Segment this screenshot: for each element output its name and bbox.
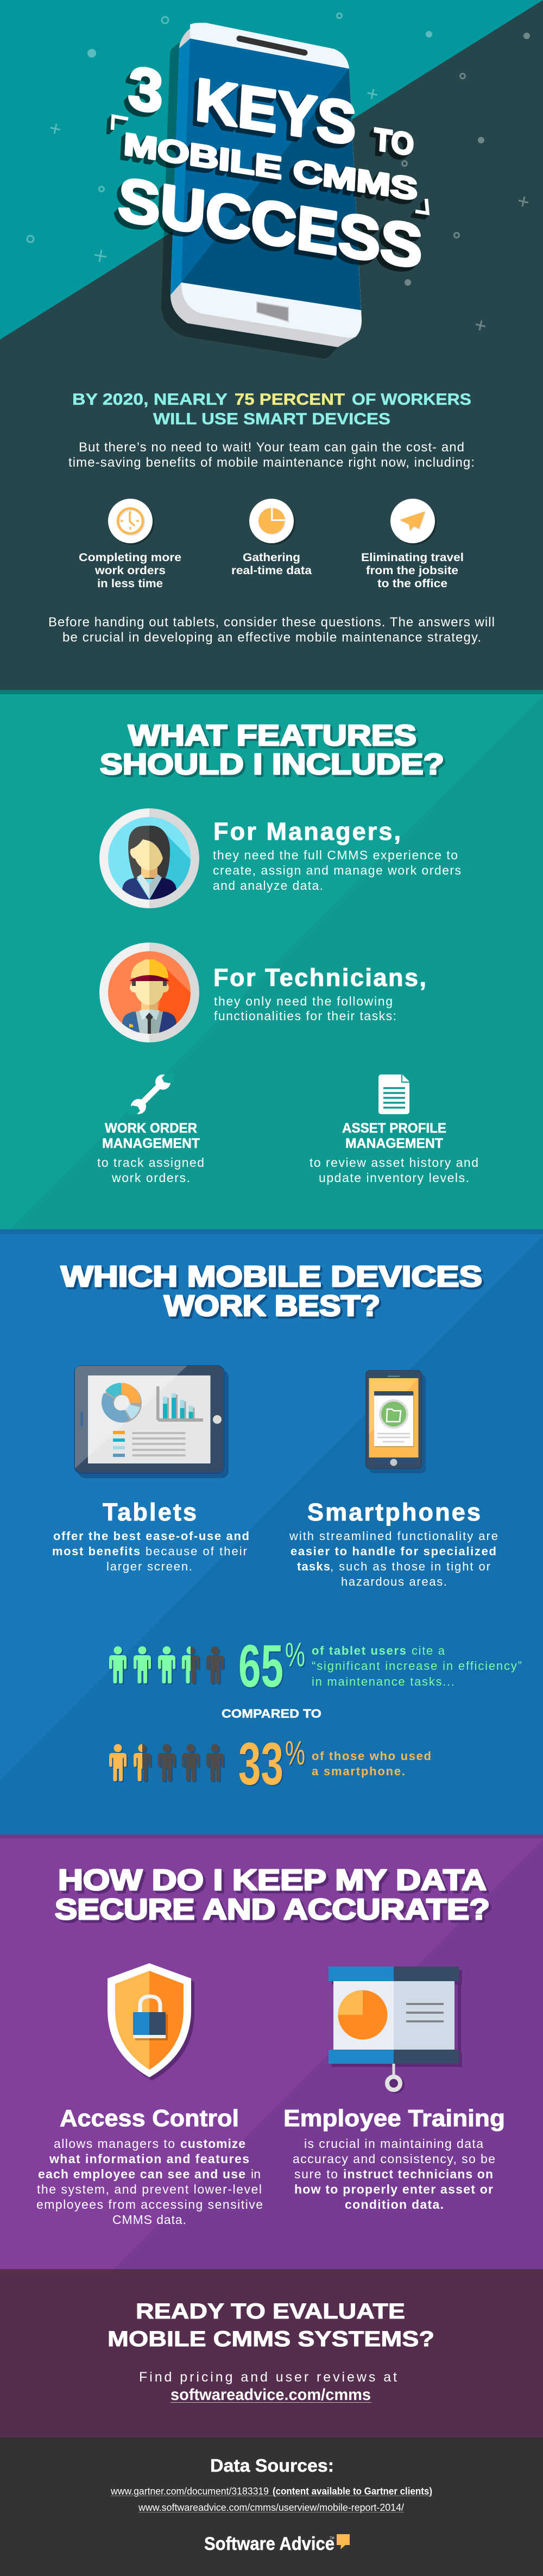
heading: data sources: Data Sources: bbox=[210, 2455, 334, 2476]
text: tablets: larger screen. bbox=[106, 1560, 192, 1573]
intro text: time-saving benefits of mobile maintenance right now, including: bbox=[68, 455, 475, 470]
chart: donut bbox=[102, 1383, 141, 1422]
panel: devices background bbox=[0, 1229, 543, 1834]
text: 65 percent caption: cite a bbox=[412, 1644, 445, 1657]
heading: ready to evaluate: MOBILE CMMS SYSTEMS? bbox=[108, 2327, 434, 2351]
panel: hero background bbox=[0, 0, 543, 690]
heading: ready to evaluate: READY TO EVALUATE bbox=[136, 2299, 405, 2323]
text: employee training: instruct technicians on bbox=[343, 2167, 493, 2181]
title: SUCCESS bbox=[117, 165, 424, 281]
heading: devices bbox=[61, 1260, 482, 1322]
feature: work order management: WORK ORDER bbox=[105, 1121, 197, 1136]
text: employee training: accuracy and consistency, so be bbox=[293, 2152, 495, 2166]
benefit: gathering real-time data bbox=[231, 499, 312, 577]
benefit: gathering real-time data: Gathering bbox=[243, 551, 300, 564]
intro text bbox=[68, 440, 475, 470]
text: tablets: because of their bbox=[146, 1544, 247, 1558]
panel: features background bbox=[0, 690, 543, 1229]
text: employee training: sure to bbox=[294, 2167, 338, 2181]
heading: ready to evaluate bbox=[108, 2299, 434, 2351]
benefit: eliminating travel: Eliminating travel bbox=[361, 551, 464, 564]
benefit: gathering real-time data: real-time data bbox=[231, 564, 312, 577]
text: find pricing: Find pricing and user reviews at bbox=[139, 2370, 397, 2385]
text: access control: the system, and prevent lower-level bbox=[37, 2182, 262, 2196]
sources: www.gartner.com/document/3183319 bbox=[110, 2486, 269, 2497]
icon: paper plane bbox=[400, 511, 426, 532]
text: 65 percent caption: in maintenance tasks... bbox=[312, 1675, 454, 1688]
list lines bbox=[113, 1431, 186, 1457]
benefit: eliminating travel: to the office bbox=[377, 577, 447, 590]
closing text: be crucial in developing an effective mobile maintenance strategy. bbox=[62, 630, 481, 645]
benefit: completing more work orders: in less time bbox=[97, 577, 163, 590]
text: smartphones: easier to handle for specialized bbox=[291, 1544, 496, 1558]
stat headline: WILL USE SMART DEVICES bbox=[153, 410, 390, 428]
text: 33 percent caption: a smartphone. bbox=[312, 1764, 405, 1778]
stat headline bbox=[72, 391, 471, 428]
heading: devices: WORK BEST? bbox=[164, 1290, 380, 1322]
stat: 33 percent number: % bbox=[285, 1735, 305, 1772]
text: for technicians: For Technicians, bbox=[213, 964, 426, 991]
icon: document bbox=[378, 1075, 409, 1114]
text: employee training bbox=[283, 2105, 505, 2211]
text: 65 percent caption: “significant increase in efficiency” bbox=[312, 1659, 522, 1673]
feature: asset profile management: to review asset history and bbox=[310, 1155, 478, 1170]
text: for technicians: functionalities for their tasks: bbox=[214, 1009, 396, 1023]
icon: folder bbox=[387, 1409, 401, 1422]
text: smartphones: with streamlined functionality are bbox=[289, 1529, 498, 1543]
benefit: completing more work orders bbox=[79, 499, 181, 590]
feature: asset profile management: MANAGEMENT bbox=[345, 1136, 443, 1151]
text: smartphones: tasks bbox=[297, 1560, 330, 1573]
panel: footer bbox=[0, 2437, 543, 2576]
icon: technician avatar bbox=[99, 943, 199, 1042]
text: for managers: create, assign and manage work orders bbox=[213, 863, 461, 877]
icon: wrench bbox=[128, 1073, 174, 1115]
text: smartphones bbox=[289, 1498, 498, 1588]
panel: security background bbox=[0, 1834, 543, 2269]
text: employee training: how to properly enter asset or bbox=[294, 2182, 493, 2196]
illustration: presentation screen bbox=[329, 1966, 462, 2094]
text: tablets: Tablets bbox=[103, 1498, 197, 1526]
pull cord bbox=[387, 2064, 405, 2094]
feature: asset profile management: update inventory levels. bbox=[319, 1171, 469, 1185]
stat: 65 percent number: 65 bbox=[238, 1633, 283, 1700]
text: access control: employees from accessing sensitive bbox=[36, 2197, 263, 2211]
text: smartphones: , such as those in tight or bbox=[330, 1560, 490, 1573]
link: softwareadvice: softwareadvice.com/cmms bbox=[171, 2386, 371, 2404]
icon: pie chart bbox=[258, 508, 286, 535]
text: for managers: they need the full CMMS experience to bbox=[213, 848, 458, 862]
text: 33 percent caption bbox=[312, 1749, 431, 1778]
title: KEYS bbox=[194, 66, 358, 158]
heading: security: SECURE AND ACCURATE? bbox=[55, 1893, 490, 1926]
text: employee training: is crucial in maintaining data bbox=[304, 2137, 483, 2151]
text: for managers bbox=[213, 818, 461, 893]
stat: 33 percent people row bbox=[109, 1744, 225, 1782]
illustration: tilted smartphone bbox=[161, 23, 362, 359]
text: tablets: most benefits bbox=[52, 1544, 140, 1558]
text: for managers: For Managers, bbox=[213, 818, 401, 845]
heading: security: HOW DO I KEEP MY DATA bbox=[58, 1864, 487, 1896]
benefit: eliminating travel: from the jobsite bbox=[366, 564, 458, 577]
feature: work order management bbox=[97, 1073, 204, 1185]
text: compared to: COMPARED TO bbox=[222, 1707, 321, 1720]
sources: (content available to Gartner clients) bbox=[273, 2486, 432, 2497]
text: tablets bbox=[52, 1498, 249, 1573]
panel: call to action bbox=[0, 2269, 543, 2437]
text: employee training: Employee Training bbox=[283, 2105, 505, 2132]
stat headline: 75 PERCENT bbox=[235, 391, 345, 409]
heading: security bbox=[55, 1864, 490, 1926]
text: employee training: condition data. bbox=[345, 2197, 444, 2211]
text: smartphones: hazardous areas. bbox=[341, 1575, 447, 1588]
text: for technicians bbox=[213, 964, 426, 1023]
text: access control: each employee can see and use bbox=[38, 2167, 245, 2181]
text: access control: Access Control bbox=[60, 2105, 239, 2132]
text: tablets: offer the best ease-of-use and bbox=[53, 1529, 249, 1543]
text: smartphones: Smartphones bbox=[307, 1498, 481, 1526]
text: access control: allows managers to bbox=[54, 2137, 175, 2151]
benefit: eliminating travel bbox=[361, 499, 464, 590]
feature: work order management: work orders. bbox=[111, 1171, 190, 1185]
text: 65 percent caption: of tablet users bbox=[312, 1644, 406, 1657]
heading: devices: WHICH MOBILE DEVICES bbox=[61, 1260, 482, 1293]
benefit: completing more work orders: Completing more bbox=[79, 551, 181, 564]
chart: pie bbox=[338, 1990, 388, 2039]
intro text: But there’s no need to wait! Your team can gain the cost- and bbox=[79, 440, 464, 455]
title: MOBILE CMMS bbox=[123, 127, 419, 207]
chart: bars bbox=[156, 1386, 203, 1422]
stat headline: OF WORKERS bbox=[352, 391, 471, 409]
stat: 65 percent number: % bbox=[285, 1636, 305, 1674]
heading: features: SHOULD I INCLUDE? bbox=[100, 748, 444, 781]
text: for managers: and analyze data. bbox=[213, 878, 323, 893]
closing text bbox=[48, 615, 495, 645]
text: access control bbox=[36, 2105, 263, 2227]
icon: clock bbox=[118, 508, 144, 535]
sources: www.softwareadvice.com/cmms/userview/mobile-report-2014/ bbox=[138, 2502, 404, 2513]
feature: asset profile management: ASSET PROFILE bbox=[342, 1121, 446, 1136]
illustration: smartphone bbox=[365, 1370, 426, 1473]
text: for technicians: they only need the following bbox=[214, 994, 393, 1008]
title bbox=[112, 54, 428, 281]
text: access control: customize bbox=[180, 2137, 245, 2151]
title: TO bbox=[373, 122, 415, 162]
title: 3 bbox=[127, 54, 165, 126]
closing text: Before handing out tablets, consider these questions. The answers will bbox=[48, 615, 495, 630]
logo: software advice: Software Advice bbox=[204, 2534, 334, 2554]
logo: software advice: TM bbox=[330, 2537, 334, 2540]
text: access control: CMMS data. bbox=[112, 2213, 186, 2227]
feature: work order management: MANAGEMENT bbox=[102, 1136, 200, 1151]
icon: shield with padlock bbox=[108, 1963, 194, 2081]
benefit: completing more work orders: work orders bbox=[94, 564, 166, 577]
sources bbox=[110, 2486, 432, 2513]
illustration: tablet bbox=[74, 1365, 229, 1478]
heading: features bbox=[100, 719, 444, 781]
feature: asset profile management bbox=[310, 1075, 478, 1185]
heading: features: WHAT FEATURES bbox=[128, 719, 416, 752]
text: 33 percent caption: of those who used bbox=[312, 1749, 431, 1763]
text: access control: what information and features bbox=[49, 2152, 249, 2166]
stat: 65 percent people row bbox=[109, 1646, 225, 1685]
feature: work order management: to track assigned bbox=[97, 1155, 204, 1170]
text: access control: in bbox=[251, 2167, 261, 2181]
icon: manager avatar bbox=[99, 808, 199, 908]
text: 65 percent caption bbox=[312, 1644, 522, 1688]
stat headline: BY 2020, NEARLY bbox=[72, 391, 228, 409]
stat: 33 percent number: 33 bbox=[238, 1731, 283, 1798]
